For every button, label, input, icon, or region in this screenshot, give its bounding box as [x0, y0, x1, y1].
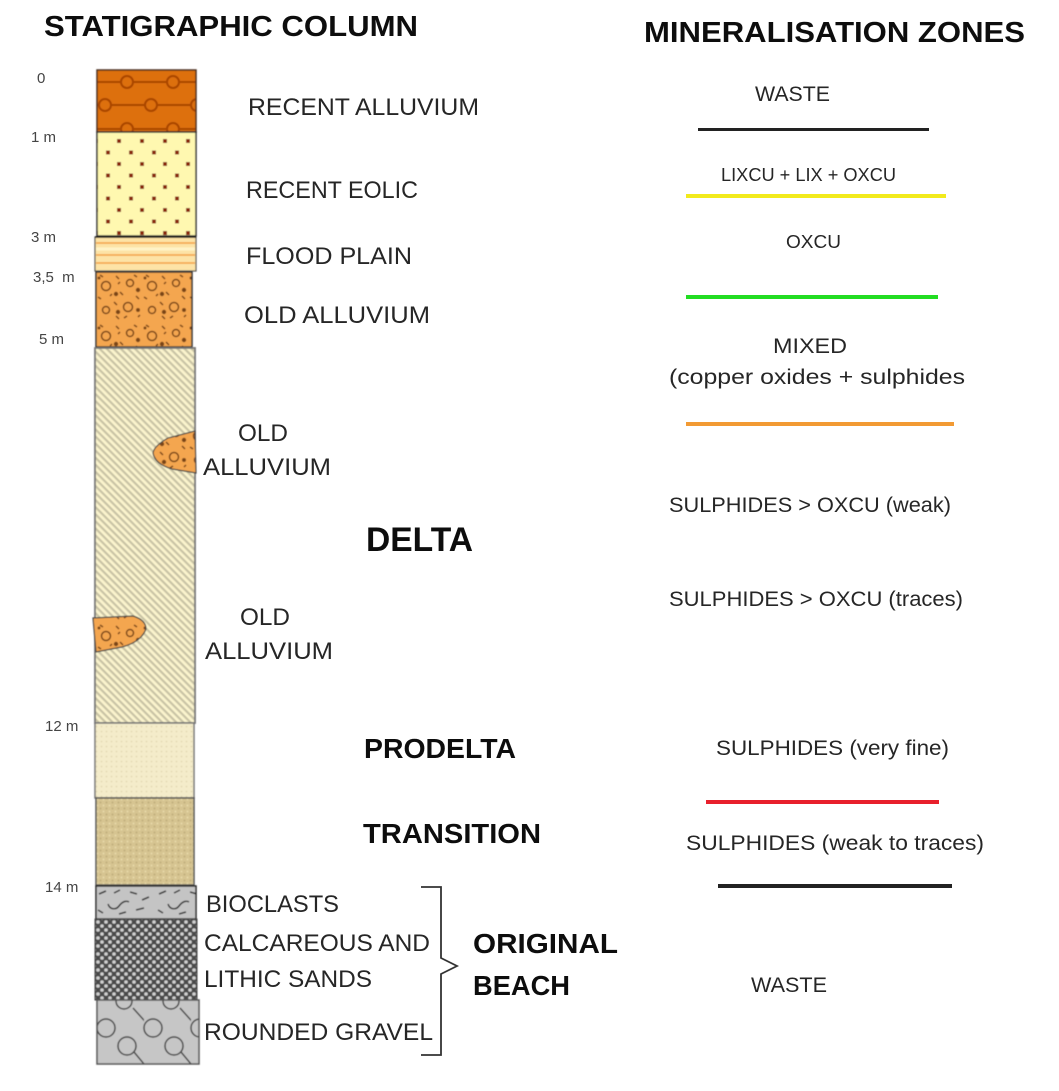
layer: rounded gravel [97, 1000, 199, 1064]
zone: oxcu: OXCU [786, 232, 841, 252]
heading: mineralisation zones: MINERALISATION ZONES [644, 17, 1025, 49]
depth scale labels [31, 70, 78, 896]
label: old alluvium lens upper [203, 420, 331, 481]
label: old alluvium lens lower: OLD [240, 604, 290, 631]
zone: mixed: MIXED [773, 335, 847, 358]
label: recent alluvium: RECENT ALLUVIUM [248, 94, 479, 121]
layer: delta [95, 348, 195, 723]
zone line: orange [686, 422, 954, 426]
zone line: green [686, 295, 938, 299]
zone: sulphides weak to traces: SULPHIDES (weak to traces) [686, 832, 984, 855]
zone: mixed [669, 335, 965, 389]
depth scale labels: 5 m [39, 331, 64, 348]
label: bioclasts: BIOCLASTS [206, 891, 339, 918]
label: calcareous and lithic sands: CALCAREOUS AND [204, 930, 430, 957]
zone: sulphides very fine: SULPHIDES (very fine) [716, 737, 949, 760]
layer: old alluvium [96, 272, 192, 347]
label: delta: DELTA [366, 521, 473, 559]
layer: bioclasts [96, 886, 196, 919]
depth scale labels: 3,5 m [33, 269, 75, 286]
label: original beach: ORIGINAL [473, 928, 618, 959]
heading: stratigraphic column: STATIGRAPHIC COLUMN [44, 11, 418, 43]
label: calcareous and lithic sands [204, 930, 430, 993]
label: recent eolic: RECENT EOLIC [246, 177, 418, 204]
layer: calcareous and lithic sands [95, 919, 197, 1000]
lens: old alluvium lower [93, 616, 146, 652]
label: original beach: BEACH [473, 970, 570, 1001]
zone: mixed: (copper oxides + sulphides [669, 366, 965, 389]
label: prodelta: PRODELTA [364, 733, 516, 764]
lens: old alluvium upper [153, 431, 196, 473]
zone: sulphides weak: SULPHIDES > OXCU (weak) [669, 494, 951, 517]
layer: transition [96, 798, 194, 885]
label: rounded gravel: ROUNDED GRAVEL [204, 1019, 433, 1046]
depth scale labels: 0 [37, 70, 45, 87]
zone: sulphides traces: SULPHIDES > OXCU (traces) [669, 588, 963, 611]
label: calcareous and lithic sands: LITHIC SANDS [204, 966, 372, 993]
label: flood plain: FLOOD PLAIN [246, 243, 412, 270]
zone: waste bottom: WASTE [751, 974, 827, 997]
depth scale labels: 1 m [31, 129, 56, 146]
zone: lixcu + lix + oxcu: LIXCU + LIX + OXCU [721, 165, 896, 185]
zone line: red [706, 800, 939, 804]
zone line: black bottom [718, 884, 952, 888]
zone line: black top [698, 128, 929, 131]
label: old alluvium lens lower [205, 604, 333, 665]
layer: recent alluvium [97, 70, 196, 132]
label: old alluvium: OLD ALLUVIUM [244, 302, 430, 329]
zone line: yellow [686, 194, 946, 198]
label: transition: TRANSITION [363, 818, 541, 849]
label: old alluvium lens upper: OLD [238, 420, 288, 447]
bracket: original beach [421, 887, 457, 1055]
zone: waste top: WASTE [755, 83, 830, 106]
stratigraphic column [93, 70, 199, 1064]
depth scale labels: 3 m [31, 229, 56, 246]
layer: flood plain [95, 237, 196, 271]
depth scale labels: 12 m [45, 718, 78, 735]
layer: recent eolic [97, 132, 196, 236]
label: old alluvium lens lower: ALLUVIUM [205, 638, 333, 665]
depth scale labels: 14 m [45, 879, 78, 896]
label: old alluvium lens upper: ALLUVIUM [203, 454, 331, 481]
layer: prodelta [95, 723, 194, 798]
label: original beach [473, 928, 618, 1001]
